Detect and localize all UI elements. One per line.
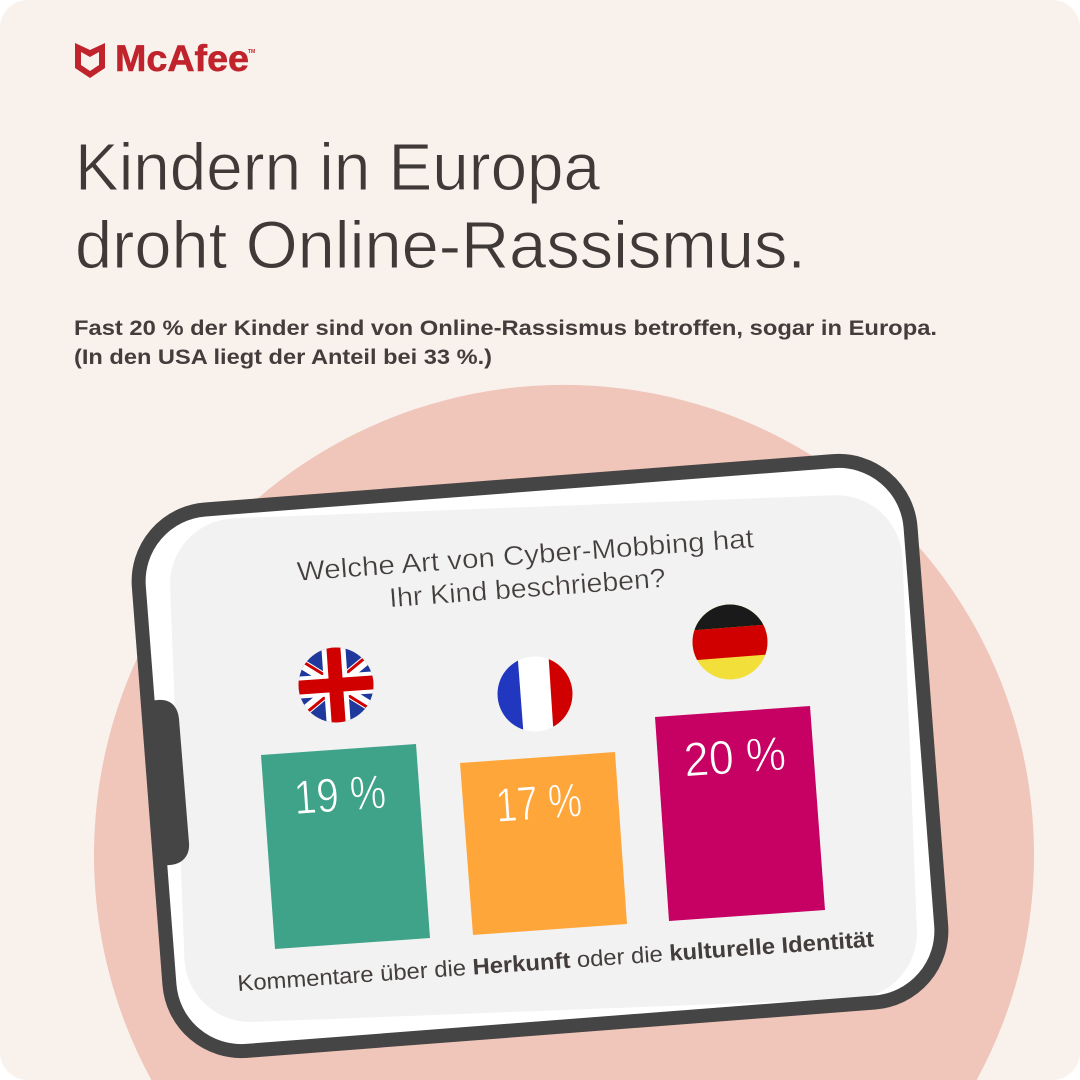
tablet body (133, 456, 947, 1056)
title: droht Online-Rassismus. (75, 208, 806, 283)
subtitle: Fast 20 % der Kinder sind von Online-Rassismus betroffen, sogar in Europa. (74, 316, 937, 340)
trademark: TM (248, 49, 255, 55)
background circle (94, 385, 1034, 1080)
tablet frame (133, 456, 947, 1056)
tablet screen (168, 493, 919, 1024)
bar: Germany 20 %: 20 % (682, 728, 788, 788)
icon: McAfee shield (75, 43, 105, 78)
bar: United Kingdom 19 % (261, 744, 430, 949)
flag: United Kingdom (298, 648, 374, 722)
subtitle (74, 316, 937, 369)
flag: France (498, 656, 572, 732)
bar: France 17 %: 17 % (494, 774, 584, 833)
flag: Germany (692, 604, 768, 680)
tablet side notch (147, 700, 189, 866)
bar: United Kingdom 19 %: 19 % (292, 766, 388, 825)
question heading: Welche Art von Cyber-Mobbing hat (296, 523, 755, 587)
chart caption: Kommentare über die Herkunft oder die kulturelle Identität (237, 927, 875, 996)
logo: McAfee (75, 38, 255, 79)
title: Kindern in Europa (75, 130, 601, 205)
question heading (296, 523, 755, 613)
tablet (133, 456, 947, 1056)
bar: France 17 % (460, 752, 627, 935)
title (75, 130, 806, 283)
subtitle: (In den USA liegt der Anteil bei 33 %.) (74, 345, 492, 369)
bar: Germany 20 % (655, 706, 825, 921)
logo wordmark: McAfee (115, 38, 249, 79)
question heading: Ihr Kind beschrieben? (388, 563, 667, 613)
